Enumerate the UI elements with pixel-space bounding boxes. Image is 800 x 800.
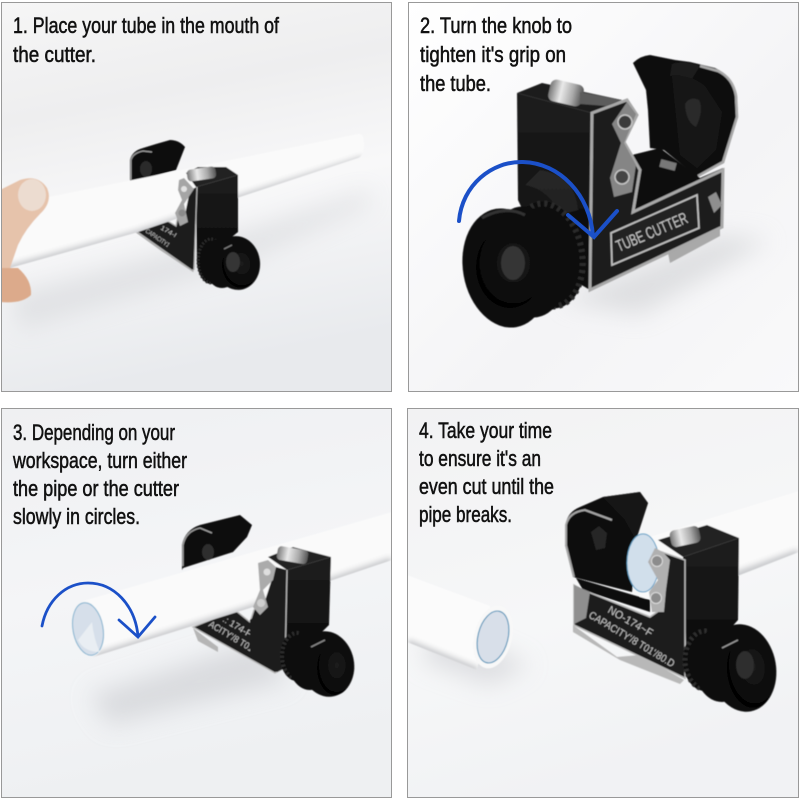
cut tube piece: [408, 610, 510, 668]
arrow: pipe rotation: [42, 583, 155, 637]
heading: step 4: to ensure it's an: [419, 446, 541, 471]
arrow: knob rotation: [459, 162, 617, 237]
illustration: cut tube and cutter: [407, 491, 799, 717]
heading: step 4: pipe breaks.: [419, 502, 512, 527]
knob: [682, 623, 778, 713]
heading: step 2: 2. Turn the knob to: [420, 13, 572, 38]
heading: step 3: [12, 420, 187, 529]
illustration: cutter and tube: 174-F: [159, 225, 180, 241]
panel: step 4 even cut until pipe breaks: [407, 408, 799, 798]
heading: step 2: the tube.: [420, 71, 491, 96]
illustration: cutter and tube: CAPACITY1/8 TO1/8O.D: [144, 228, 194, 265]
illustration: cutter and tube: [67, 512, 392, 702]
heading: step 2: [420, 13, 572, 96]
jaw: [633, 55, 738, 177]
heading: step 4: [419, 418, 554, 527]
heading: step 1: 1. Place your tube in the mouth of: [13, 13, 280, 38]
illustration: cutter and tube: [0, 134, 364, 302]
white tube: [95, 546, 391, 656]
shadow under pipe: [16, 200, 356, 324]
white tube: [10, 155, 360, 268]
heading: step 4: even cut until the: [419, 474, 554, 499]
tube open end: [72, 602, 105, 656]
heading: step 3: workspace, turn either: [12, 448, 187, 473]
plate engraving: CAPACITY'/8 T01'/80.D: [586, 609, 677, 670]
heading: step 3: 3. Depending on your: [13, 420, 175, 445]
heading: step 3: the pipe or the cutter: [13, 476, 179, 501]
shadow under cutter: [423, 650, 520, 686]
heading: step 4: 4. Take your time: [419, 418, 552, 443]
panel: step 1 place tube: [0, 2, 392, 392]
nameplate: TUBE CUTTER: TUBE CUTTER: [614, 209, 691, 256]
plate engraving: NO-174~F: [606, 604, 655, 640]
panel: step 2 turn knob: [408, 2, 799, 392]
heading: step 3: slowly in circles.: [13, 504, 140, 529]
panel: step 3 turn pipe or cutter: [1, 408, 392, 798]
illustration: cutter close-up: [453, 55, 738, 335]
illustration: cutter and tube: .: 174-F: [220, 614, 254, 640]
jaw: [565, 492, 648, 592]
illustration: cutter and tube: ACITY'/8 T01'/80.D: [206, 619, 274, 666]
shadow under cutter: [580, 232, 754, 317]
tube behind cutter: [639, 524, 798, 600]
nameplate: TUBE CUTTER: [611, 195, 699, 265]
plate engraving: [588, 605, 675, 667]
knob: [462, 200, 586, 328]
hand holding tube: [0, 178, 49, 302]
knob: [197, 233, 264, 293]
heading: step 1: the cutter.: [13, 42, 96, 67]
screw strip: [610, 102, 636, 197]
heading: step 1: [13, 16, 280, 62]
heading: step 2: tighten it's grip on: [420, 42, 566, 67]
shadow under pipe: [94, 646, 284, 726]
knob: [280, 630, 356, 698]
